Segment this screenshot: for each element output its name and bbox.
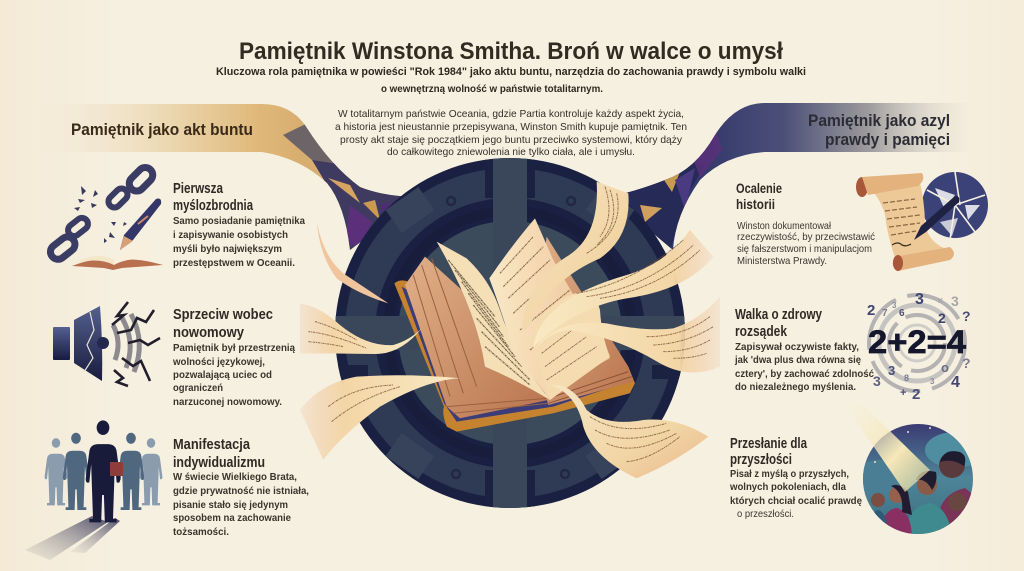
icon: spiral with 2+2=4: 8: [904, 373, 909, 383]
icon: spiral with 2+2=4: 2: [867, 302, 875, 319]
heading: right banner: [808, 112, 950, 149]
block: Sprzeciw wobec nowomowy: narzuconej nowomowy.: [173, 396, 282, 408]
icon: spiral with 2+2=4: K: [938, 298, 943, 305]
block: Ocalenie historii: się fałszerstwom i manipulacjom: [737, 243, 872, 255]
block: Manifestacja indywidualizmu: Manifestacja: [173, 437, 251, 453]
open book with flying pages: [300, 182, 720, 478]
book: [72, 259, 163, 270]
block: Walka o zdrowy rozsądek: jak 'dwa plus dwa równa się: [734, 354, 861, 366]
block: Walka o zdrowy rozsądek: cztery', by zachować zdolność: [735, 368, 874, 380]
block: Przesłanie dla przyszłości: przyszłości: [730, 452, 792, 468]
icon: spiral with 2+2=4: [867, 291, 971, 403]
block: Pierwsza myślozbrodnia: przestępstwem w Oceanii.: [173, 257, 295, 269]
heading: left banner: Pamiętnik jako akt buntu: [71, 121, 253, 139]
block: Przesłanie dla przyszłości: Pisał z myślą o przyszłych,: [730, 468, 849, 480]
block: Manifestacja indywidualizmu: tożsamości.: [173, 526, 229, 538]
heading: right banner: prawdy i pamięci: [825, 131, 950, 149]
block: Pierwsza myślozbrodnia: [173, 181, 305, 269]
pen: [120, 199, 161, 250]
subtitle: Kluczowa rola pamiętnika w powieści "Rok 1984" jako aktu buntu, narzędzia do zachowania prawdy i symbolu walki: [216, 66, 806, 78]
icon: spiral with 2+2=4: 7: [882, 308, 888, 319]
block: Przesłanie dla przyszłości: o przeszłości.: [737, 508, 794, 520]
page: right: [533, 230, 713, 347]
block: Przesłanie dla przyszłości: [729, 436, 862, 520]
page: top right: [522, 182, 629, 330]
block: Walka o zdrowy rozsądek: Zapisywał oczywiste fakty,: [735, 341, 859, 353]
block: Ocalenie historii: Ocalenie: [736, 181, 782, 196]
title: Pamiętnik Winstona Smitha. Broń w walce o umysł: [239, 38, 783, 65]
central gear disc: [335, 155, 685, 511]
shattered disc: [922, 172, 988, 238]
block: Walka o zdrowy rozsądek: Walka o zdrowy: [735, 307, 822, 323]
intro paragraph: a historia jest nieustannie przepisywana, Winston Smith kupuje pamiętnik. Ten: [335, 121, 687, 133]
icon: spiral with 2+2=4: 3: [873, 373, 881, 389]
scroll: [862, 175, 950, 266]
block: Pierwsza myślozbrodnia: Samo posiadanie pamiętnika: [173, 215, 305, 227]
block: Pierwsza myślozbrodnia: myśli było największym: [173, 243, 282, 255]
block: Przesłanie dla przyszłości: wolnych pokoleniach, dla: [729, 481, 846, 493]
block: Manifestacja indywidualizmu: sposobem na zachowanie: [173, 512, 291, 524]
ribbon: left banner: [79, 104, 402, 250]
icon: spiral with 2+2=4: 2: [912, 386, 920, 403]
right page stack: [533, 237, 633, 405]
block: Sprzeciw wobec nowomowy: [172, 307, 295, 408]
left page stack: [405, 257, 548, 418]
block: Manifestacja indywidualizmu: W świecie Wielkiego Brata,: [173, 471, 297, 483]
block: Sprzeciw wobec nowomowy: wolności językowej,: [172, 356, 265, 368]
icon: spiral with 2+2=4: 3: [930, 377, 935, 386]
icon: spiral with 2+2=4: +: [900, 387, 906, 399]
page: bottom right: [550, 385, 708, 478]
icon: spiral with 2+2=4: 3: [915, 291, 924, 308]
intro paragraph: prosty akt staje się początkiem jego buntu przeciwko systemowi, który dąży: [340, 134, 683, 146]
chain lower: [47, 234, 78, 262]
icon: future generations in circle: [856, 408, 973, 534]
fan of cream pages: [533, 292, 610, 400]
block: Ocalenie historii: Winston dokumentował: [737, 220, 832, 232]
ribbon: right banner: [626, 103, 950, 250]
block: Pierwsza myślozbrodnia: i zapisywanie osobistych: [173, 229, 288, 241]
page: left lower: [300, 375, 460, 460]
icon: spiral with 2+2=4: ?: [962, 308, 971, 324]
page: left middle: [300, 303, 422, 354]
cover navy edge: [402, 287, 633, 422]
intro paragraph: W totalitarnym państwie Oceania, gdzie Partia kontroluje każdy aspekt życia,: [338, 108, 684, 120]
icon: cracked megaphone: [53, 302, 160, 386]
block: Ocalenie historii: [736, 181, 875, 267]
block: Ocalenie historii: historii: [736, 197, 775, 212]
right leaf: [489, 218, 610, 400]
icon: crowd and lone figure: [25, 420, 162, 560]
icon: spiral with 2+2=4: ?: [962, 355, 971, 371]
intro paragraph: do całkowitego zniewolenia nie tylko ciała, ale i umysłu.: [387, 146, 635, 158]
block: Manifestacja indywidualizmu: pisanie stało się jedynym: [173, 499, 288, 511]
block: Manifestacja indywidualizmu: [173, 437, 309, 538]
icon: spiral with 2+2=4: 2: [938, 310, 946, 326]
icon: spiral with 2+2=4: 6: [899, 308, 905, 319]
chain upper: [126, 164, 156, 194]
block: Przesłanie dla przyszłości: których chciał ocalić prawdę: [730, 495, 862, 507]
block: Manifestacja indywidualizmu: indywidualizmu: [173, 455, 265, 471]
book cover: [394, 280, 635, 432]
fragments: [74, 186, 127, 243]
page: left sliver: [317, 222, 388, 303]
left leaf: [437, 242, 550, 400]
block: Walka o zdrowy rozsądek: rozsądek: [735, 324, 788, 340]
pen: [914, 196, 960, 240]
page: right lower: [533, 297, 720, 373]
block: Manifestacja indywidualizmu: gdzie prywatność nie istniała,: [173, 485, 309, 497]
block: Sprzeciw wobec nowomowy: Pamiętnik był przestrzenią: [173, 342, 295, 354]
icon: scroll, pen and shattered disc: [856, 172, 988, 271]
heading: right banner: Pamiętnik jako azyl: [808, 112, 950, 130]
block: Sprzeciw wobec nowomowy: Sprzeciw wobec: [173, 307, 273, 323]
block: Sprzeciw wobec nowomowy: nowomowy: [173, 325, 244, 341]
block: Walka o zdrowy rozsądek: [734, 307, 874, 393]
icon: spiral with 2+2=4: 2+2=4: [868, 324, 966, 360]
icon: broken chain with pen and book: [47, 164, 163, 270]
block: Ocalenie historii: rzeczywistość, by przeciwstawić: [737, 231, 875, 243]
icon: spiral with 2+2=4: 3: [951, 293, 959, 309]
icon: spiral with 2+2=4: 3: [892, 301, 897, 310]
block: Przesłanie dla przyszłości: Przesłanie dla: [730, 436, 808, 452]
block: Sprzeciw wobec nowomowy: ograniczeń: [173, 382, 223, 394]
icon: spiral with 2+2=4: 3: [888, 363, 895, 378]
subtitle: [216, 66, 806, 95]
icon: spiral with 2+2=4: 4: [951, 374, 960, 391]
block: Pierwsza myślozbrodnia: myślozbrodnia: [173, 198, 254, 214]
subtitle: o wewnętrzną wolność w państwie totalitarnym.: [381, 84, 603, 95]
block: Walka o zdrowy rozsądek: do niezależnego myślenia.: [735, 381, 856, 393]
intro paragraph: [335, 108, 687, 158]
block: Pierwsza myślozbrodnia: Pierwsza: [173, 181, 224, 197]
icon: spiral with 2+2=4: o: [941, 360, 949, 375]
block: Sprzeciw wobec nowomowy: pozwalającą uciec od: [173, 369, 272, 381]
block: Ocalenie historii: Ministerstwa Prawdy.: [737, 255, 827, 267]
